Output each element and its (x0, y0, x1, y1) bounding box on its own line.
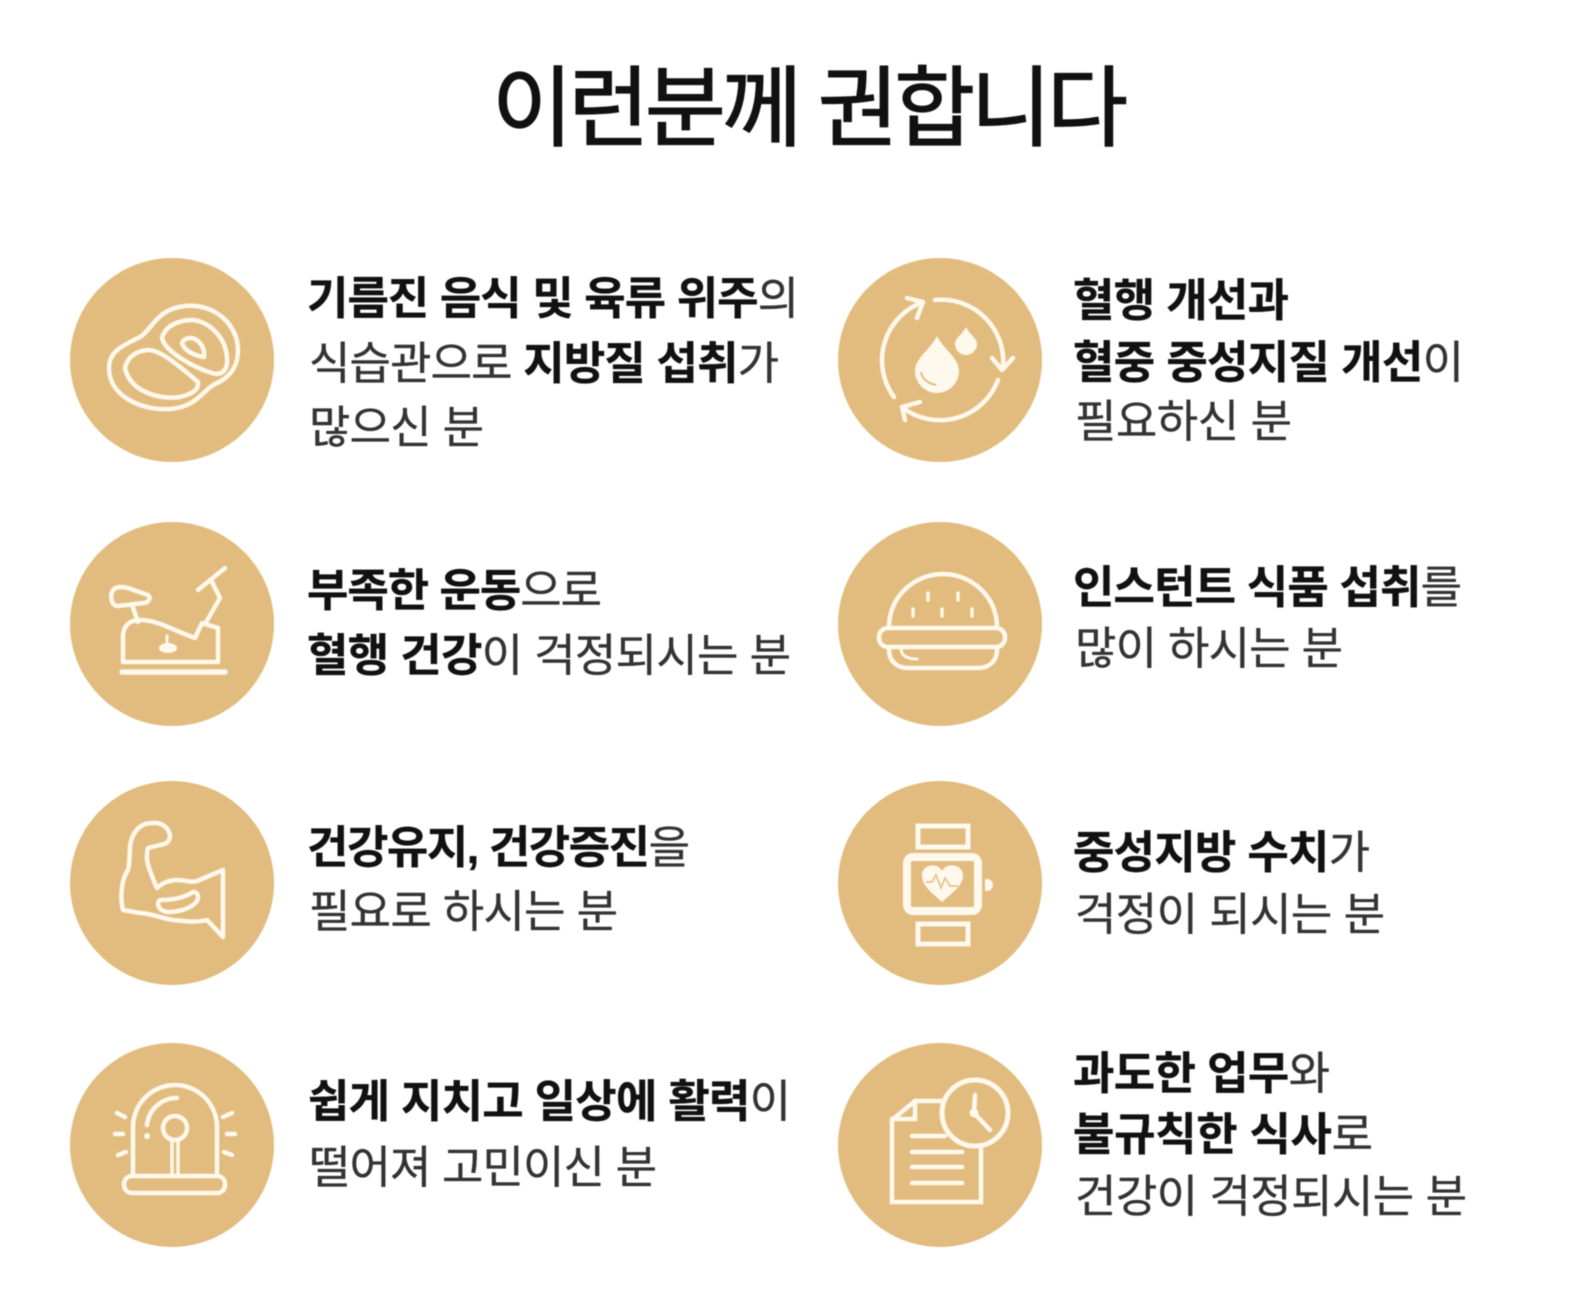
text: fatty food: 식습관으로 지방질 섭취가 (309, 338, 779, 389)
item: blood circulation (838, 258, 1464, 462)
text: fatty food: 많으신 분 (309, 402, 484, 453)
item: overwork (838, 1043, 1467, 1247)
text: health maintenance: 필요로 하시는 분 (309, 886, 618, 937)
text: instant food (1073, 562, 1462, 674)
icon: smart watch (838, 781, 1042, 985)
text: blood circulation: 혈행 개선과 (1073, 275, 1289, 326)
text: instant food: 많이 하시는 분 (1075, 623, 1343, 674)
text: lack of exercise: 부족한 운동으로 (307, 565, 602, 616)
text: fatigue: 쉽게 지치고 일상에 활력이 (308, 1076, 791, 1127)
text: health maintenance: 건강유지, 건강증진을 (307, 822, 690, 873)
item: health maintenance (70, 781, 690, 985)
text: triglyceride levels: 걱정이 되시는 분 (1075, 889, 1385, 940)
text: blood circulation: 혈중 중성지질 개선이 (1073, 337, 1464, 388)
text: blood circulation (1073, 275, 1464, 447)
text: blood circulation: 필요하신 분 (1075, 396, 1292, 447)
text: fatty food: 기름진 음식 및 육류 위주의 (307, 273, 799, 324)
icon: flexed arm (70, 781, 274, 985)
item: lack of exercise (70, 522, 791, 726)
icon: siren (70, 1043, 274, 1247)
item: fatigue (70, 1043, 791, 1247)
icon: document and clock (838, 1043, 1042, 1247)
icon: exercise bike (70, 522, 274, 726)
item: fatty food diet (70, 258, 799, 462)
text: overwork: 건강이 걱정되시는 분 (1075, 1171, 1467, 1222)
text: triglyceride levels (1073, 827, 1385, 940)
text: fatty food (307, 273, 799, 453)
text: fatigue: 떨어져 고민이신 분 (309, 1142, 657, 1193)
text: lack of exercise: 혈행 건강이 걱정되시는 분 (307, 630, 791, 681)
text: health maintenance (307, 822, 690, 937)
item: instant food (838, 522, 1462, 726)
text: fatigue (308, 1076, 791, 1193)
text: overwork: 불규칙한 식사로 (1073, 1109, 1373, 1160)
text: overwork: 과도한 업무와 (1073, 1048, 1330, 1099)
item: triglyceride levels (838, 781, 1385, 985)
text: instant food: 인스턴트 식품 섭취를 (1073, 562, 1462, 613)
text: triglyceride levels: 중성지방 수치가 (1073, 827, 1370, 878)
icon: water cycle (838, 258, 1042, 462)
text: overwork (1073, 1048, 1467, 1222)
title: 이런분께 권합니다 (492, 59, 1128, 158)
text: lack of exercise (307, 565, 791, 681)
icon: burger (838, 522, 1042, 726)
icon: steak (70, 258, 274, 462)
